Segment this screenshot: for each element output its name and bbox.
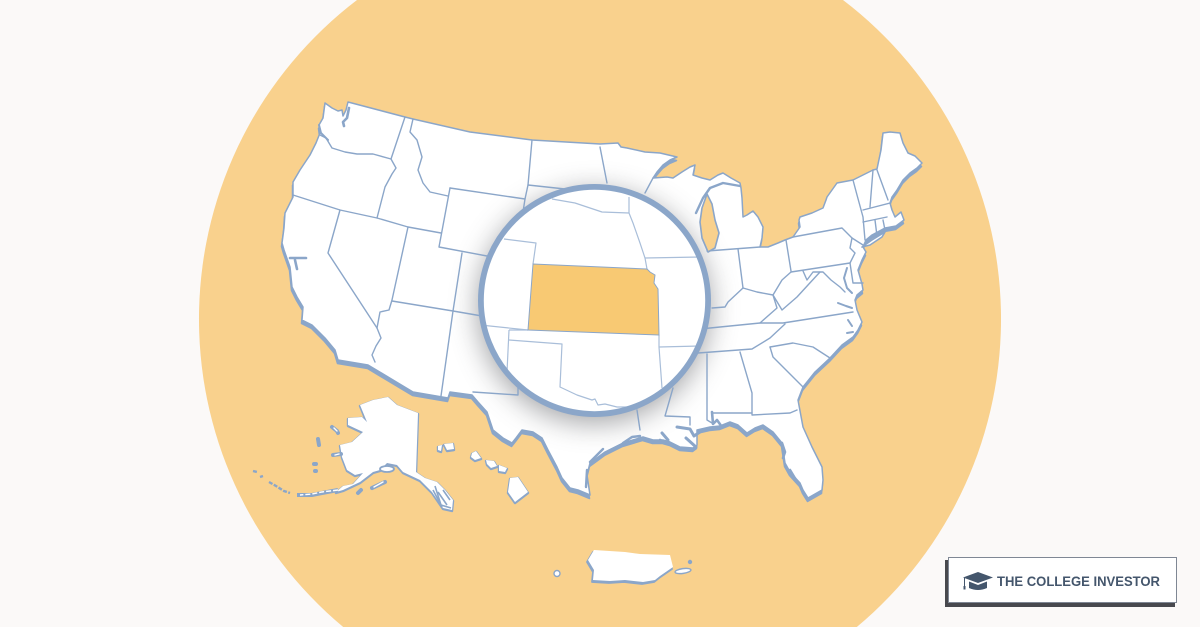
coastal detail squiggles [290, 108, 853, 487]
map: contiguous United States [282, 102, 922, 502]
island: Long Island [862, 232, 885, 247]
enlarged neighbouring state borders [480, 197, 700, 407]
map: Hawaii [438, 443, 528, 503]
lens ring [481, 187, 708, 414]
large orange circle [199, 0, 1001, 627]
magnifying lens [480, 187, 708, 414]
map: Alaska [253, 397, 453, 511]
icon: graduation cap [963, 572, 993, 590]
magnifier shadow on map [478, 191, 710, 423]
highlighted state: Kansas [528, 264, 659, 335]
state borders [293, 117, 890, 430]
lake Michigan [700, 194, 719, 252]
wordmark: THE COLLEGE INVESTOR [997, 574, 1160, 589]
logo badge: The College Investor [945, 558, 1176, 607]
map: Puerto Rico [554, 550, 692, 584]
Kenai peninsula island [380, 466, 394, 472]
